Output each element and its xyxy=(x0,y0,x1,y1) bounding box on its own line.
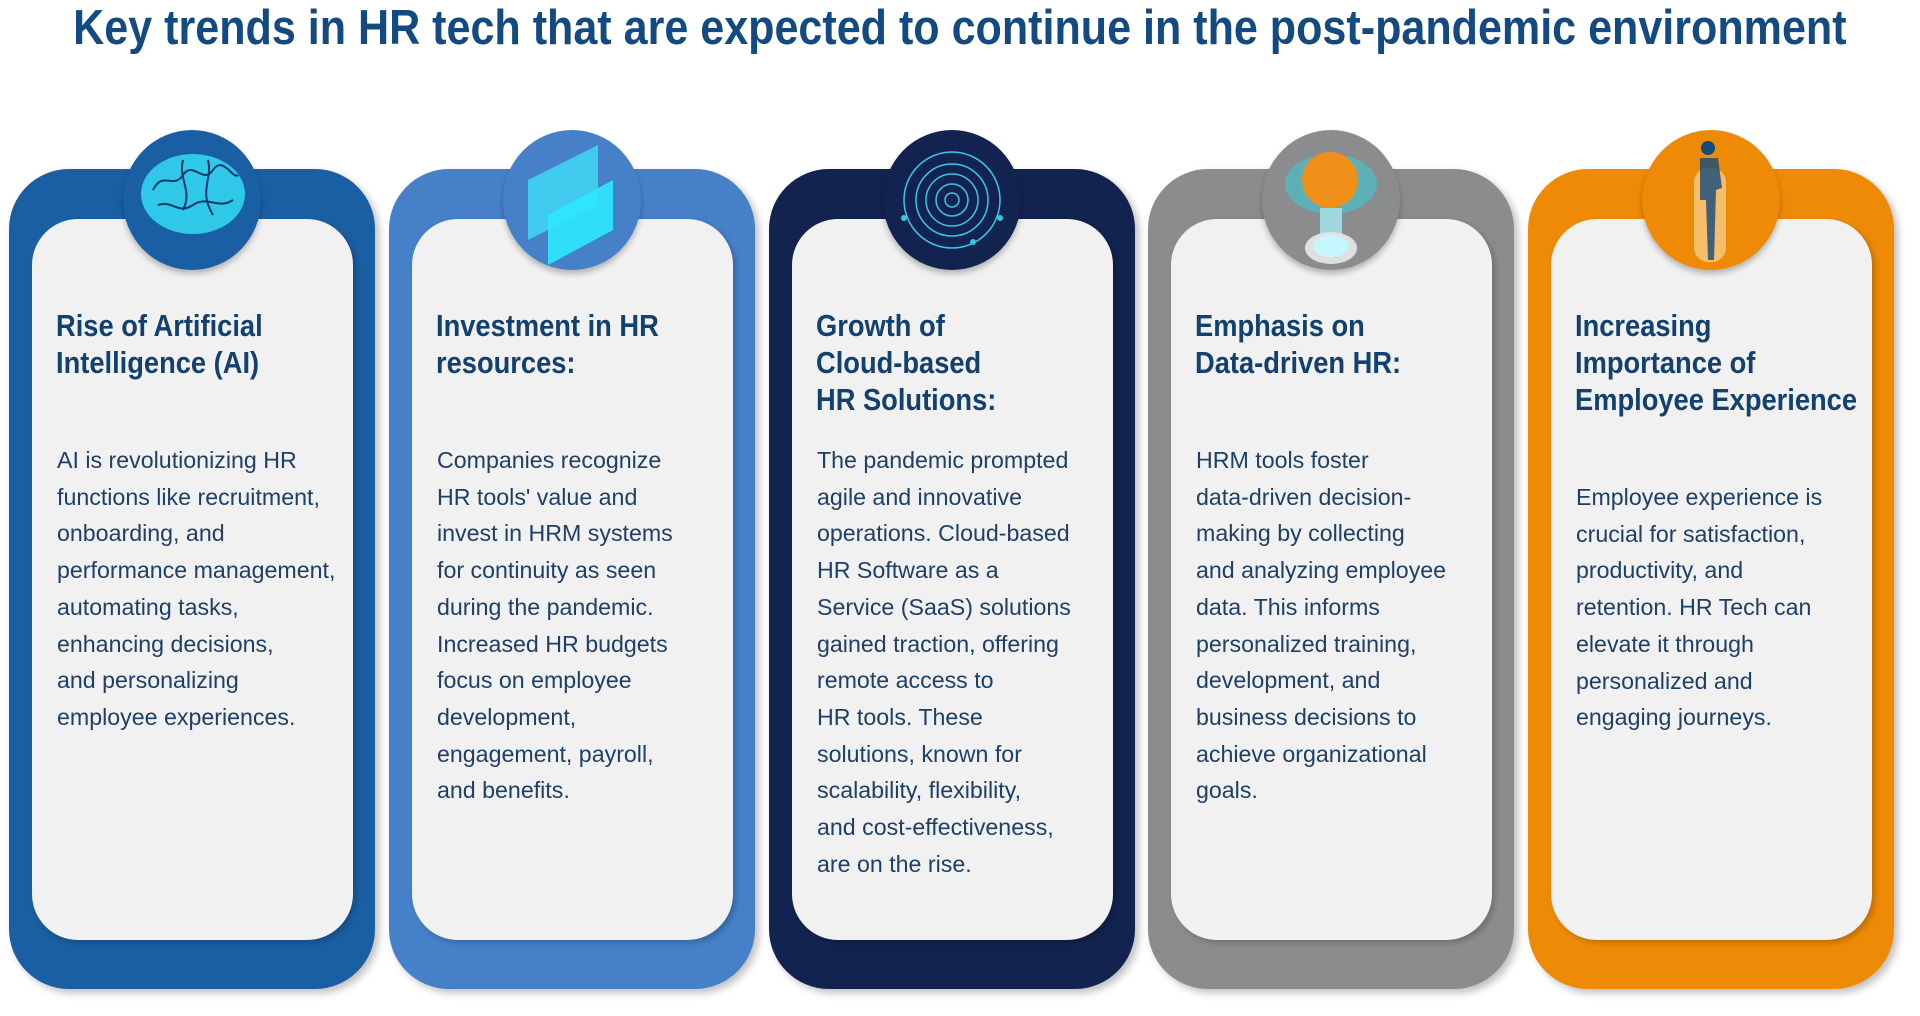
text: cloud: and cost-effectiveness, xyxy=(817,814,1054,840)
text: data-driven: data-driven decision- xyxy=(1196,484,1411,510)
heading: investment: resources: xyxy=(436,345,576,380)
text: cloud: solutions, known for xyxy=(817,741,1022,767)
text: AI: employee experiences. xyxy=(57,704,295,730)
text: AI: enhancing decisions, xyxy=(57,631,274,657)
text: data-driven: HRM tools foster xyxy=(1196,447,1369,473)
text: cloud: The pandemic prompted xyxy=(817,447,1068,473)
text: cloud: HR tools. These xyxy=(817,704,983,730)
text: cloud: agile and innovative xyxy=(817,484,1022,510)
text: cloud: operations. Cloud-based xyxy=(817,520,1070,546)
text: data-driven: goals. xyxy=(1196,777,1258,803)
heading: investment: Investment in HR xyxy=(436,308,659,343)
text: AI: onboarding, and xyxy=(57,520,225,546)
panel: data-driven xyxy=(1148,169,1514,989)
text: investment: focus on employee xyxy=(437,667,632,693)
heading: cloud: Growth of xyxy=(816,308,945,343)
icon: screens xyxy=(503,130,641,270)
panel: investment xyxy=(389,169,755,989)
text: AI xyxy=(57,447,335,730)
text: cloud: Service (SaaS) solutions xyxy=(817,594,1071,620)
text: investment: during the pandemic. xyxy=(437,594,654,620)
text: employee experience: crucial for satisfaction, xyxy=(1576,521,1805,547)
text: data-driven: development, and xyxy=(1196,667,1380,693)
text: investment: Increased HR budgets xyxy=(437,631,668,657)
text: data-driven: achieve organizational xyxy=(1196,741,1427,767)
heading: AI: Intelligence (AI) xyxy=(56,345,259,380)
text: employee experience: engaging journeys. xyxy=(1576,704,1772,730)
text: cloud: gained traction, offering xyxy=(817,631,1059,657)
text: AI: functions like recruitment, xyxy=(57,484,320,510)
text: employee experience: elevate it through xyxy=(1576,631,1754,657)
text: investment: engagement, payroll, xyxy=(437,741,654,767)
heading: data-driven: Emphasis on xyxy=(1195,308,1365,343)
text: employee experience xyxy=(1576,484,1822,730)
text: cloud xyxy=(817,447,1071,877)
text: employee experience: Employee experience is xyxy=(1576,484,1822,510)
text: investment: for continuity as seen xyxy=(437,557,656,583)
text: data-driven xyxy=(1196,447,1446,803)
heading: data-driven xyxy=(1195,308,1401,380)
text: data-driven: business decisions to xyxy=(1196,704,1416,730)
text: data-driven: personalized training, xyxy=(1196,631,1416,657)
heading: employee experience: Employee Experience xyxy=(1575,382,1857,417)
text: AI: performance management, xyxy=(57,557,335,583)
heading: investment xyxy=(436,308,659,380)
text: employee experience: personalized and xyxy=(1576,668,1753,694)
icon: person xyxy=(1642,130,1780,270)
heading: AI: Rise of Artificial xyxy=(56,308,263,343)
text: investment: HR tools' value and xyxy=(437,484,637,510)
text: data-driven: and analyzing employee xyxy=(1196,557,1446,583)
text: investment xyxy=(437,447,673,803)
text: data-driven: making by collecting xyxy=(1196,520,1405,546)
text: investment: and benefits. xyxy=(437,777,570,803)
text: AI: AI is revolutionizing HR xyxy=(57,447,297,473)
heading: employee experience xyxy=(1575,308,1857,417)
icon: rings xyxy=(883,130,1021,270)
text: investment: development, xyxy=(437,704,576,730)
text: data-driven: data. This informs xyxy=(1196,594,1380,620)
text: cloud: scalability, flexibility, xyxy=(817,777,1021,803)
text: investment: invest in HRM systems xyxy=(437,520,673,546)
text: investment: Companies recognize xyxy=(437,447,661,473)
heading: employee experience: Increasing xyxy=(1575,308,1711,343)
text: employee experience: productivity, and xyxy=(1576,557,1743,583)
panel: employee experience xyxy=(1528,169,1894,989)
heading: cloud xyxy=(816,308,996,417)
title: Key trends in HR tech that are expected to continue in the post-pandemic environment xyxy=(73,1,1847,55)
text: employee experience: retention. HR Tech can xyxy=(1576,594,1811,620)
heading: AI xyxy=(56,308,263,380)
text: cloud: are on the rise. xyxy=(817,851,972,877)
text: cloud: remote access to xyxy=(817,667,994,693)
panel: AI xyxy=(9,169,375,989)
text: cloud: HR Software as a xyxy=(817,557,999,583)
heading: cloud: HR Solutions: xyxy=(816,382,996,417)
panel: cloud xyxy=(769,169,1135,989)
icon: hologram brain xyxy=(1262,130,1400,270)
text: AI: and personalizing xyxy=(57,667,239,693)
heading: cloud: Cloud-based xyxy=(816,345,981,380)
heading: data-driven: Data-driven HR: xyxy=(1195,345,1401,380)
icon: brain xyxy=(123,130,261,270)
heading: employee experience: Importance of xyxy=(1575,345,1755,380)
text: AI: automating tasks, xyxy=(57,594,239,620)
